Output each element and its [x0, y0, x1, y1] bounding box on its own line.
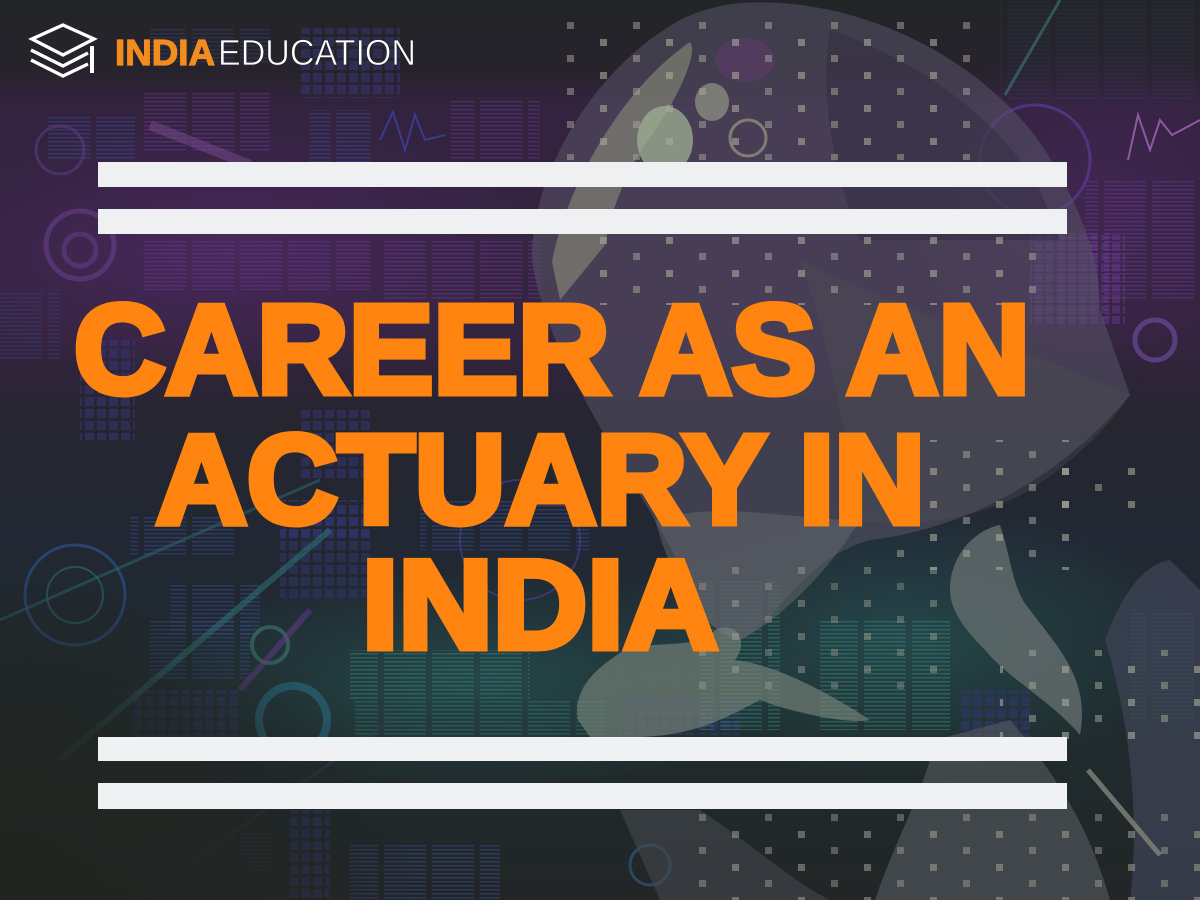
- logo wordmark: EDUCATION: [218, 32, 416, 73]
- robot temple highlight: [552, 42, 692, 300]
- robot dome dark interior: [826, 30, 1060, 240]
- logo: [31, 25, 416, 76]
- title: [74, 279, 1030, 675]
- illustration: robot head and hands: [532, 2, 1200, 900]
- robot eye glow: [637, 38, 775, 174]
- title: ACTUARY IN: [156, 409, 925, 550]
- title: CAREER AS AN: [74, 279, 1030, 420]
- bottom double bar: [98, 737, 1067, 809]
- logo wordmark: INDIA: [115, 32, 215, 73]
- robot neck and jaw: [655, 511, 860, 640]
- dark vignette corner: [0, 560, 420, 900]
- robot arm right: [950, 525, 1082, 735]
- robot head dome: [532, 2, 1130, 640]
- robot hand: [577, 627, 870, 737]
- robot sleeve lower: [620, 810, 830, 900]
- robot forearm right: [1105, 560, 1200, 900]
- scattered square dots: [560, 20, 1200, 900]
- title: INDIA: [362, 534, 718, 675]
- icon: graduation cap made of stacked layers: [31, 25, 94, 76]
- robot body lower: [875, 720, 1110, 900]
- robot face plate: [800, 260, 1130, 524]
- top double bar: [98, 162, 1067, 234]
